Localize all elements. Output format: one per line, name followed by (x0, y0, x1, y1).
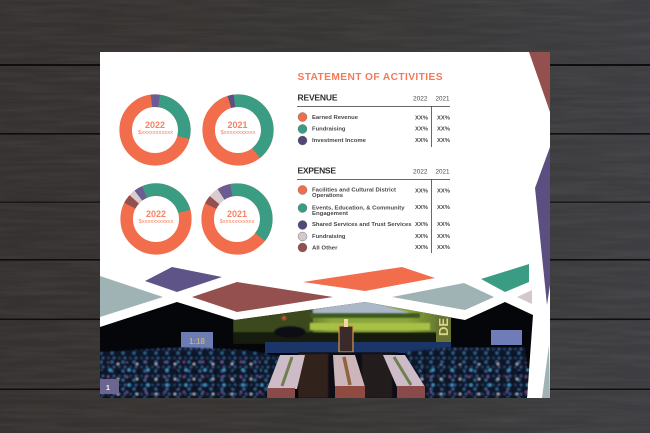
row: events: Engagement (312, 211, 348, 217)
donut: revenue 2021: 2021 (228, 120, 248, 131)
donut: expense 2021 (196, 178, 278, 260)
row: facilities: XX% (415, 188, 428, 194)
expense table (297, 166, 450, 253)
crowd middle (298, 352, 398, 398)
row: investment income: XX% (415, 138, 428, 144)
row: fundraising: Fundraising (312, 127, 346, 133)
table 1 (267, 355, 305, 398)
podium (339, 319, 353, 352)
row: facilities (298, 186, 450, 199)
page number: 1 (106, 385, 110, 392)
stage strip (265, 342, 451, 353)
row: fundraising: XX% (415, 126, 428, 132)
right screen (491, 330, 522, 345)
donut: expense 2022: $xxxxxxxxxxx (138, 219, 174, 225)
page number (100, 379, 119, 394)
row: all other (298, 243, 450, 252)
title: STATEMENT OF ACTIVITIES (298, 72, 443, 83)
table 3 (383, 355, 425, 398)
expense heading: EXPENSE (298, 166, 336, 176)
row: fundraising: XX% (437, 126, 450, 132)
revenue year headers (413, 96, 450, 102)
row: earned revenue: Earned Revenue (312, 115, 358, 121)
donut: revenue 2022: $xxxxxxxxxxx (138, 130, 174, 136)
revenue year headers: 2021 (436, 96, 450, 102)
row: shared services (298, 220, 450, 230)
crowd right (405, 347, 530, 398)
row: fundraising (298, 232, 450, 241)
row: investment income (298, 136, 450, 145)
left screen: 1:18 (189, 337, 206, 346)
shape: grey-teal left (100, 276, 163, 317)
accent: purple right edge (535, 147, 550, 305)
donut: expense 2021: 2021 (227, 209, 248, 220)
event photo (100, 300, 535, 398)
stage backdrop (233, 300, 451, 344)
row: investment income: Investment Income (312, 138, 366, 144)
left screen (181, 332, 213, 349)
donut: expense 2022 (115, 178, 197, 260)
row: events: Events, Education, & Community (312, 205, 405, 211)
revenue table (297, 92, 450, 147)
shape: brown diamond (192, 282, 333, 312)
row: events: XX% (415, 205, 428, 211)
row: facilities: Operations (312, 193, 343, 199)
row: investment income: XX% (437, 138, 450, 144)
expense year headers (413, 170, 450, 176)
revenue year headers: 2022 (413, 96, 428, 102)
backdrop sign (436, 314, 451, 342)
shape: green (481, 264, 529, 292)
row: fundraising (298, 124, 450, 134)
donut: expense 2021: $xxxxxxxxxxx (220, 219, 255, 225)
row: events (298, 204, 450, 217)
shape: purple diamond (145, 267, 222, 292)
revenue heading: REVENUE (298, 92, 338, 102)
donut: revenue 2021 (201, 93, 275, 167)
backdrop sign: DE (436, 318, 451, 336)
row: fundraising: XX% (437, 234, 450, 240)
row: facilities: XX% (437, 188, 450, 194)
shape: orange diamond (303, 267, 435, 291)
donut: revenue 2021: $xxxxxxxxxxx (220, 130, 256, 136)
donut: revenue 2022: 2022 (145, 120, 165, 131)
row: facilities: Facilities and Cultural District (312, 188, 396, 194)
row: all other: All Other (312, 246, 338, 252)
donut: expense 2022: 2022 (146, 209, 166, 220)
row: shared services: XX% (415, 222, 428, 228)
row: fundraising: XX% (415, 234, 428, 240)
row: earned revenue: XX% (437, 116, 450, 122)
accent: brown corner (529, 52, 550, 112)
row: earned revenue: XX% (415, 116, 428, 122)
white page (100, 52, 550, 398)
expense year headers: 2021 (436, 170, 450, 176)
row: shared services: XX% (437, 222, 450, 228)
row: all other: XX% (437, 245, 450, 251)
donut: revenue 2022 (122, 97, 188, 163)
row: fundraising: Fundraising (312, 234, 346, 240)
table 2 (333, 355, 365, 398)
accent: grey-teal bottom right (542, 345, 550, 398)
shape: grey-teal centre (392, 283, 494, 310)
shape: pale triangle (517, 290, 532, 304)
expense year headers: 2022 (413, 170, 428, 176)
row: all other: XX% (415, 245, 428, 251)
row: events: XX% (437, 205, 450, 211)
row: shared services: Shared Services and Trust Services (312, 222, 412, 228)
row: earned revenue (298, 112, 450, 122)
crowd left (100, 347, 280, 398)
